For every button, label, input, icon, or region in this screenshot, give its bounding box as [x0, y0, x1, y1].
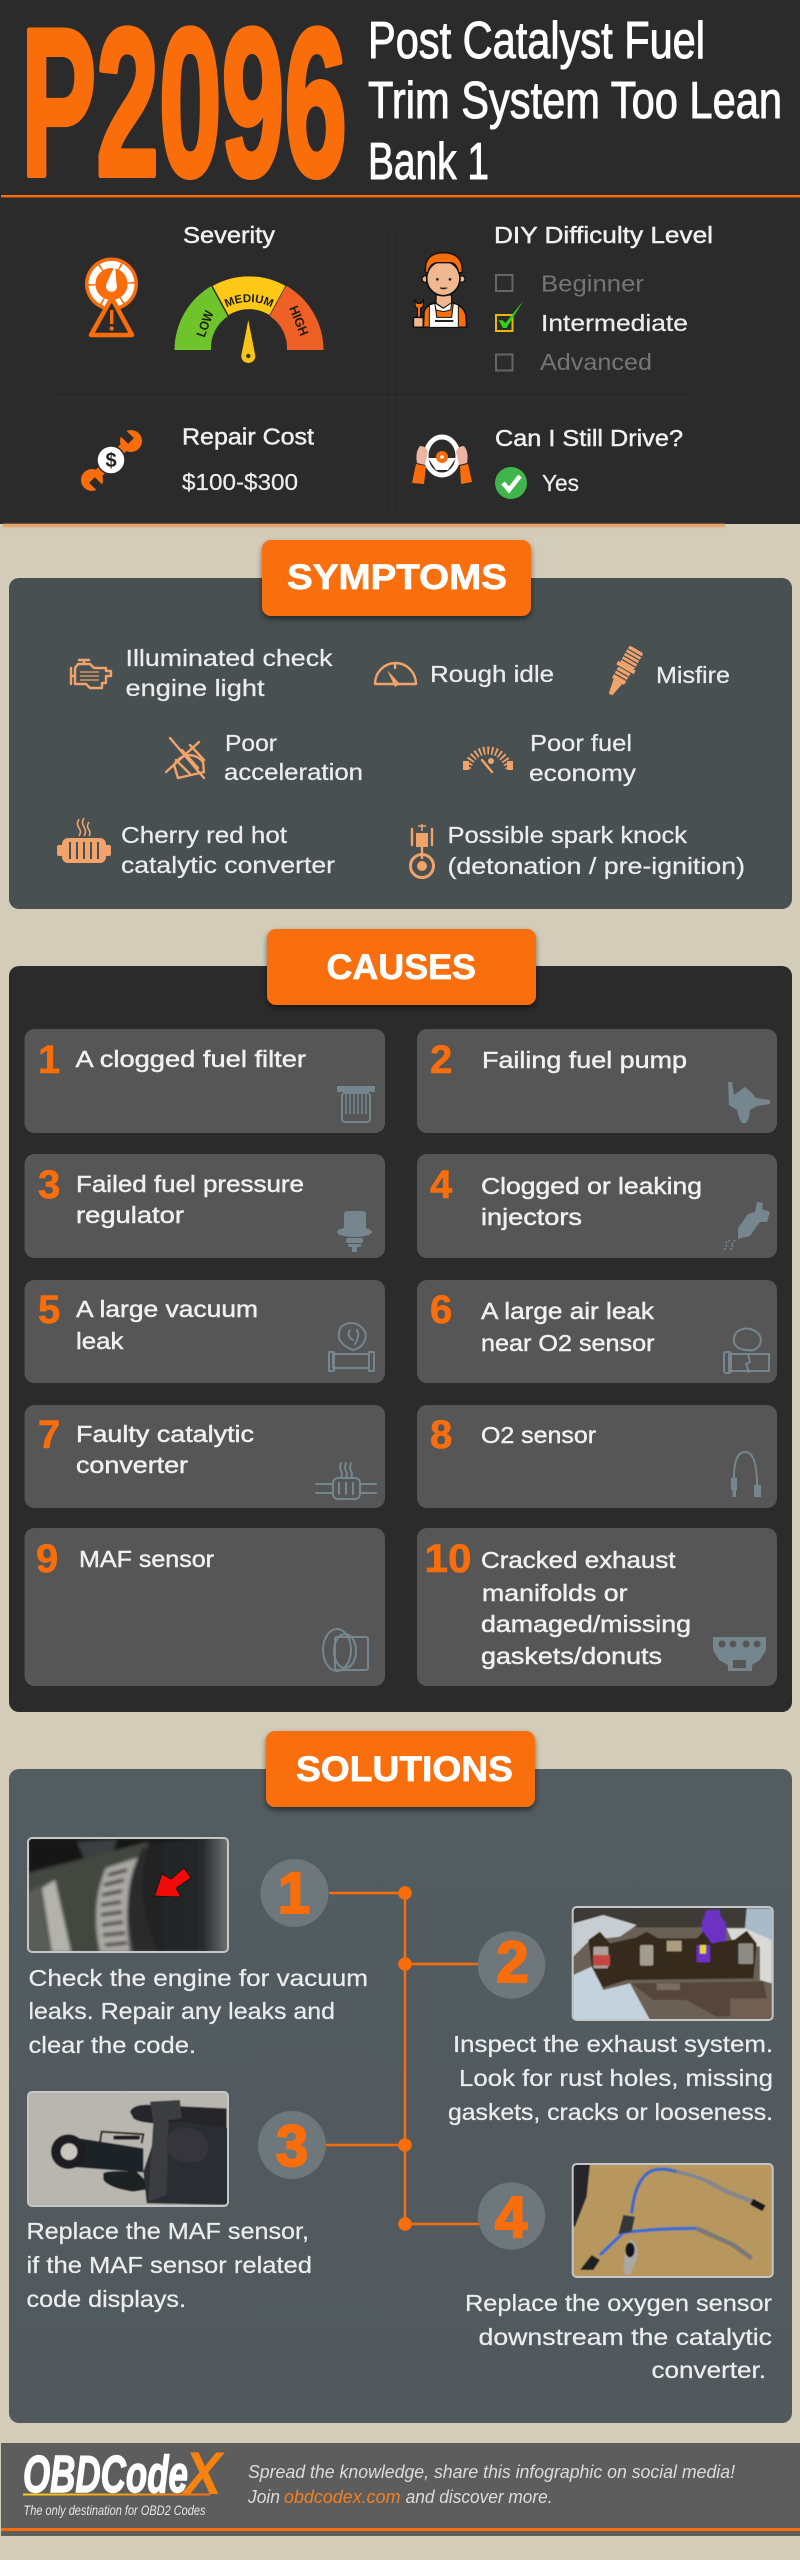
text: Poor fuel — [530, 730, 632, 756]
title text: Post Catalyst Fuel — [368, 12, 705, 70]
text — [465, 2290, 772, 2383]
gauge: low medium high: LOW — [193, 308, 217, 339]
text: downstream the catalytic — [478, 2324, 772, 2350]
cause 10: damaged/missing — [481, 1611, 691, 1637]
block: can I still drive — [412, 425, 683, 499]
number badge 2: 2 — [496, 1930, 529, 1995]
icon: spark plug — [602, 644, 645, 699]
symptom: rough idle — [375, 661, 554, 687]
icon: speedometer warning — [85, 258, 138, 335]
text: if the MAF sensor related — [26, 2252, 312, 2278]
cause 8: 8 — [430, 1413, 452, 1457]
photo: MAF sensor in gloved hand — [28, 2092, 228, 2206]
solution 4 — [465, 2164, 773, 2383]
photo: hose clamp — [28, 1838, 228, 1952]
symptom: poor acceleration — [166, 730, 363, 785]
icon: steering wheel with hands — [412, 437, 472, 484]
text: Check the engine for vacuum — [28, 1965, 368, 1991]
text: clear the code. — [28, 2032, 196, 2058]
text: Possible spark knock — [448, 822, 688, 848]
heading: causes: CAUSES — [326, 948, 476, 987]
cause 1: 1 — [38, 1038, 60, 1082]
cause 9 — [24, 1528, 385, 1686]
heading: repair cost: Repair Cost — [182, 424, 315, 450]
gauge: low medium high: MEDIUM — [224, 294, 274, 308]
cause 8: O2 sensor — [481, 1422, 596, 1448]
text: engine light — [126, 675, 265, 701]
tagline: The only destination for OBD2 Codes — [24, 2502, 206, 2518]
icon: catalytic converter with heat — [57, 818, 111, 863]
gauge: low medium high: HIGH — [286, 304, 312, 338]
icon: mechanic — [413, 253, 467, 327]
icon: O2 sensor — [731, 1452, 761, 1497]
text — [224, 730, 363, 785]
panel: header — [0, 0, 800, 528]
logo: OBDCodeX: X — [181, 2440, 226, 2507]
cause 4: Clogged or leaking — [481, 1173, 702, 1199]
text: Look for rust holes, missing — [459, 2065, 773, 2091]
gauge: low medium high — [174, 276, 324, 363]
text: gaskets, cracks or looseness. — [448, 2099, 773, 2125]
symptom: check engine light — [71, 645, 333, 701]
cause 2: Failing fuel pump — [482, 1047, 687, 1073]
cause 6: near O2 sensor — [481, 1330, 655, 1356]
cause 1: A clogged fuel filter — [76, 1046, 306, 1072]
call to action text — [247, 2462, 735, 2507]
cause 5: 5 — [38, 1288, 60, 1332]
icon: exhaust manifold — [713, 1637, 766, 1671]
cause 2: 2 — [430, 1038, 452, 1082]
icon: air leak — [724, 1328, 769, 1373]
text: code displays. — [26, 2286, 186, 2312]
icon: MAF sensor — [323, 1629, 368, 1671]
panel: footer — [1, 2440, 800, 2536]
cause 2 — [417, 1029, 777, 1133]
cause 1 — [24, 1029, 385, 1133]
timeline connector — [326, 1886, 479, 2231]
cause 4: 4 — [430, 1163, 453, 1207]
text — [529, 730, 637, 786]
symptom: cherry red hot catalytic converter — [57, 818, 335, 878]
title text: Bank 1 — [368, 133, 489, 191]
heading: solutions: SOLUTIONS — [296, 1750, 513, 1789]
text: Inspect the exhaust system. — [453, 2031, 773, 2057]
icon: piston — [410, 824, 434, 878]
heading: severity: Severity — [183, 222, 276, 248]
cause 10: Cracked exhaust — [481, 1547, 676, 1573]
cause 7 — [24, 1405, 385, 1508]
text: Replace the oxygen sensor — [465, 2290, 772, 2316]
cause 6 — [417, 1280, 777, 1383]
icon: fuel gauge — [463, 750, 513, 772]
number badge 1: 1 — [278, 1861, 310, 1926]
call to action text: Join — [247, 2487, 280, 2507]
cause 5 — [24, 1280, 385, 1383]
photo: exhaust manifold — [573, 1907, 773, 2021]
panel: causes — [9, 929, 792, 1712]
value: yes: Yes — [542, 470, 579, 496]
icon: red arrow — [155, 1868, 191, 1897]
text — [26, 2218, 312, 2312]
text: Rough idle — [430, 661, 554, 687]
icon: fuel filter — [337, 1086, 375, 1122]
icon: green check — [495, 467, 527, 499]
cause 9: 9 — [36, 1537, 58, 1581]
heading: solutions — [266, 1731, 535, 1807]
text: acceleration — [224, 759, 363, 785]
icon: vacuum leak — [329, 1323, 374, 1371]
number badge 2 — [478, 1930, 545, 1999]
number badge 3 — [258, 2111, 326, 2179]
text — [448, 822, 745, 879]
checkbox: intermediate checked — [496, 300, 524, 331]
cause 3 — [24, 1154, 385, 1258]
text: Replace the MAF sensor, — [26, 2218, 309, 2244]
block: severity — [85, 222, 324, 363]
option: advanced: Advanced — [540, 349, 652, 375]
icon: wrench with dollar: $ — [105, 450, 117, 472]
option: beginner: Beginner — [541, 270, 644, 296]
icon: check engine — [71, 660, 111, 688]
icon: gauge — [375, 663, 416, 687]
text — [448, 2031, 773, 2125]
cause 4 — [417, 1154, 777, 1258]
heading: symptoms: SYMPTOMS — [287, 558, 507, 597]
text — [121, 822, 335, 878]
number badge 3: 3 — [276, 2114, 308, 2179]
number badge 4 — [478, 2182, 545, 2250]
icon: crossed gauge — [166, 738, 204, 778]
cause 5: A large vacuum — [76, 1296, 258, 1322]
cause 10: 10 — [424, 1537, 472, 1581]
logo: OBDCodeX: OBDCode — [23, 2446, 188, 2504]
text: leaks. Repair any leaks and — [28, 1998, 335, 2024]
text: Misfire — [656, 662, 730, 688]
cause 3: 3 — [38, 1163, 60, 1207]
title text — [368, 12, 782, 191]
cause 3: Failed fuel pressure — [76, 1171, 304, 1197]
heading: symptoms — [262, 540, 531, 616]
cause 7: 7 — [38, 1413, 60, 1457]
text: Cherry red hot — [121, 822, 288, 848]
block: repair cost — [76, 424, 315, 497]
solution 1 — [28, 1838, 368, 2058]
panel: solutions — [9, 1731, 792, 2423]
cause 6: A large air leak — [481, 1298, 655, 1324]
cause 5: leak — [76, 1328, 124, 1354]
symptom: possible spark knock — [410, 822, 745, 879]
icon: fuel pump — [728, 1082, 770, 1123]
symptom: misfire — [602, 644, 730, 699]
cause 10: manifolds or — [482, 1580, 628, 1606]
text: Poor — [225, 730, 277, 756]
call to action text: and discover more. — [406, 2487, 553, 2507]
symptom: poor fuel economy — [463, 730, 637, 786]
text: economy — [529, 760, 637, 786]
checkbox: advanced — [496, 354, 512, 370]
cause 9: MAF sensor — [79, 1546, 214, 1572]
icon: pressure regulator — [337, 1211, 372, 1252]
text — [28, 1965, 368, 2058]
heading: DIY difficulty level: DIY Difficulty Level — [494, 222, 713, 248]
cause 6: 6 — [430, 1288, 452, 1332]
icon: injector — [724, 1202, 770, 1251]
solution 3 — [26, 2092, 326, 2312]
block: DIY difficulty level — [413, 222, 713, 375]
cause 10 — [417, 1528, 777, 1686]
call to action text: obdcodex.com — [284, 2487, 400, 2507]
text: (detonation / pre-ignition) — [448, 853, 745, 879]
solution 2 — [448, 1907, 773, 2125]
number badge 1 — [260, 1859, 328, 1927]
call to action text: Spread the knowledge, share this infographic on social media! — [248, 2462, 735, 2482]
icon: wrench with dollar — [76, 424, 147, 497]
cause 7: converter — [76, 1452, 188, 1478]
cause 4: injectors — [481, 1204, 582, 1230]
number badge 4: 4 — [495, 2185, 527, 2250]
option: intermediate: Intermediate — [541, 310, 688, 336]
checkbox: beginner — [496, 275, 512, 291]
panel: symptoms — [9, 540, 792, 909]
heading: causes — [267, 929, 536, 1005]
text: catalytic converter — [121, 852, 335, 878]
icon: catalytic converter — [316, 1463, 376, 1499]
value: repair cost: $100-$300 — [182, 469, 298, 495]
text: Illuminated check — [126, 645, 333, 671]
cause 3: regulator — [76, 1202, 184, 1228]
cause 7: Faulty catalytic — [76, 1421, 254, 1447]
heading: can I still drive: Can I Still Drive? — [495, 425, 683, 451]
cause 8 — [417, 1405, 777, 1508]
text: converter. — [652, 2357, 766, 2383]
text — [126, 645, 333, 701]
cause 10: gaskets/donuts — [481, 1643, 662, 1669]
photo: oxygen sensors — [573, 2164, 773, 2277]
